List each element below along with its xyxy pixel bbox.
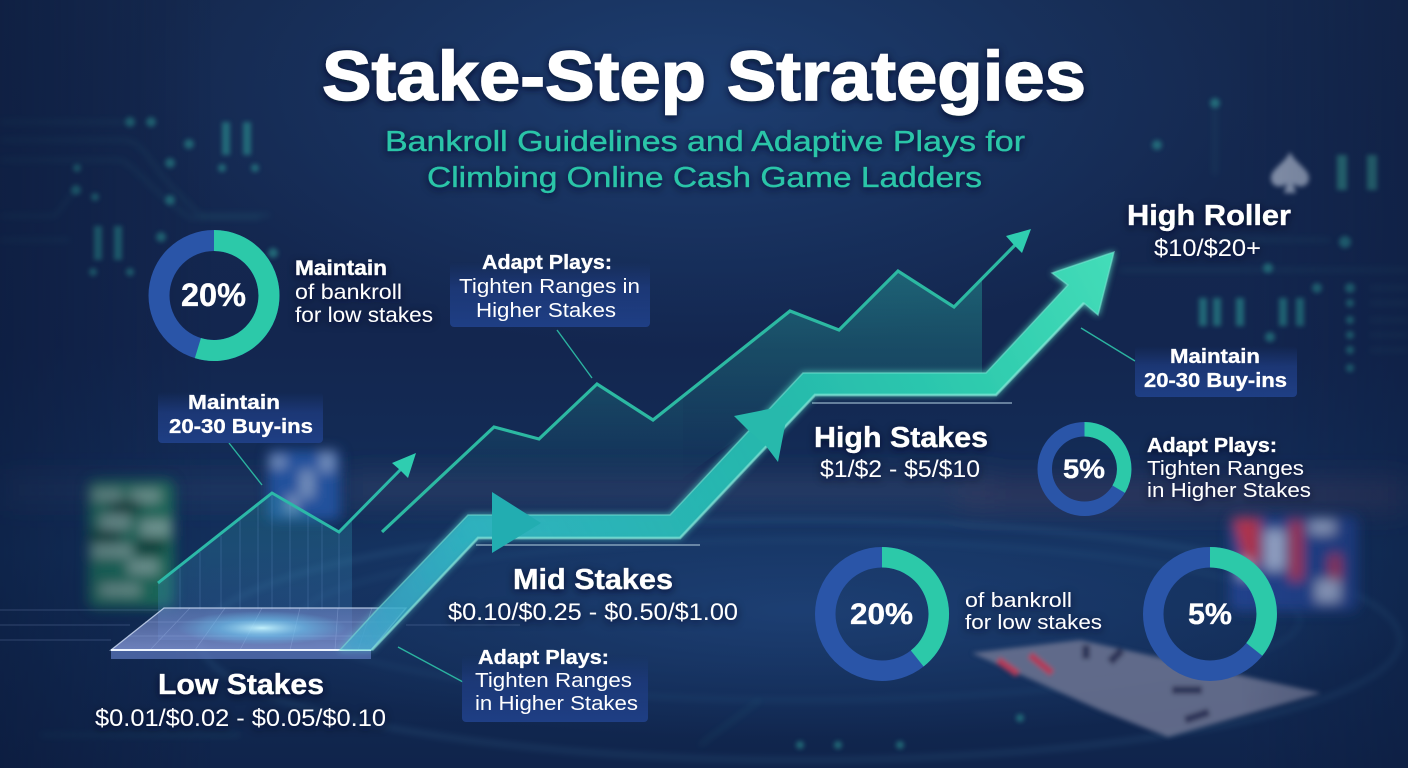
donut: 20% bottom: 20% — [850, 598, 913, 631]
text: maintain of bankroll — [295, 257, 433, 327]
title: Stake-Step Strategies — [322, 37, 1086, 115]
text: maintain of bankroll: of bankroll — [295, 281, 402, 304]
donut: 5% bottom — [1153, 557, 1267, 671]
label: low stakes: $0.01/$0.02 - $0.05/$0.10 — [95, 705, 386, 732]
arrowhead: high stakes — [734, 405, 789, 462]
callout: adapt plays top: Adapt Plays: — [482, 252, 612, 274]
label: low stakes — [95, 669, 386, 732]
text: of bankroll for low stakes: for low stakes — [965, 612, 1102, 634]
platform: low stakes base — [0, 608, 520, 659]
callout: adapt plays bottom: Tighten Ranges — [475, 670, 632, 692]
donut: 20% low stakes top left — [159, 240, 269, 350]
label: high roller — [1127, 200, 1291, 262]
blurred playing cards — [972, 640, 1321, 737]
text: adapt plays right — [1147, 435, 1311, 502]
label: high stakes — [814, 422, 988, 483]
callout: maintain buy-ins right — [1135, 346, 1297, 397]
chart: upper zigzag growth line with area — [382, 229, 1031, 532]
donut: 5% bottom: 5% — [1188, 598, 1232, 631]
callout: adapt plays bottom: Adapt Plays: — [478, 647, 609, 669]
blurred chip stacks — [88, 450, 1358, 611]
callout: adapt plays bottom — [462, 647, 648, 722]
callout: adapt plays bottom: in Higher Stakes — [475, 693, 638, 715]
main stepped arrow — [340, 252, 1114, 650]
label: high stakes: High Stakes — [814, 422, 988, 454]
callout: maintain buy-ins left: Maintain — [188, 392, 280, 414]
callout: adapt plays top: Tighten Ranges in — [459, 276, 640, 298]
label: mid stakes — [448, 564, 738, 626]
text: maintain of bankroll: for low stakes — [295, 304, 433, 327]
callout: adapt plays top: Higher Stakes — [476, 300, 616, 322]
text: maintain of bankroll: Maintain — [295, 257, 387, 280]
text: adapt plays right: in Higher Stakes — [1147, 480, 1311, 502]
callout: adapt plays top — [450, 252, 650, 327]
callout: maintain buy-ins right: Maintain — [1170, 346, 1260, 368]
donut: 5% small — [1045, 429, 1124, 509]
donut: 20% low stakes top left: 20% — [181, 277, 246, 313]
label: high stakes: $1/$2 - $5/$10 — [820, 456, 980, 483]
leader lines — [229, 328, 1135, 682]
donut: 20% bottom — [825, 557, 939, 671]
spade — [1271, 152, 1309, 193]
callout: maintain buy-ins right: 20-30 Buy-ins — [1144, 370, 1287, 392]
text: adapt plays right: Tighten Ranges — [1147, 458, 1304, 480]
label: high roller: $10/$20+ — [1154, 235, 1261, 262]
label: mid stakes: Mid Stakes — [513, 564, 673, 596]
text: of bankroll for low stakes — [965, 590, 1102, 634]
label: low stakes: Low Stakes — [158, 669, 324, 701]
text: adapt plays right: Adapt Plays: — [1147, 435, 1277, 457]
label: mid stakes: $0.10/$0.25 - $0.50/$1.00 — [448, 599, 738, 626]
arrowhead: mid stakes — [492, 492, 541, 553]
callout: maintain buy-ins left: 20-30 Buy-ins — [169, 416, 313, 438]
label: high roller: High Roller — [1127, 200, 1291, 232]
callout: maintain buy-ins left — [158, 392, 323, 443]
subtitle — [385, 126, 1025, 194]
text: of bankroll for low stakes: of bankroll — [965, 590, 1072, 612]
subtitle: Bankroll Guidelines and Adaptive Plays for — [385, 126, 1025, 158]
chart: lower zigzag growth line with area — [158, 453, 416, 640]
donut: 5% small: 5% — [1063, 454, 1105, 484]
subtitle: Climbing Online Cash Game Ladders — [427, 162, 982, 194]
